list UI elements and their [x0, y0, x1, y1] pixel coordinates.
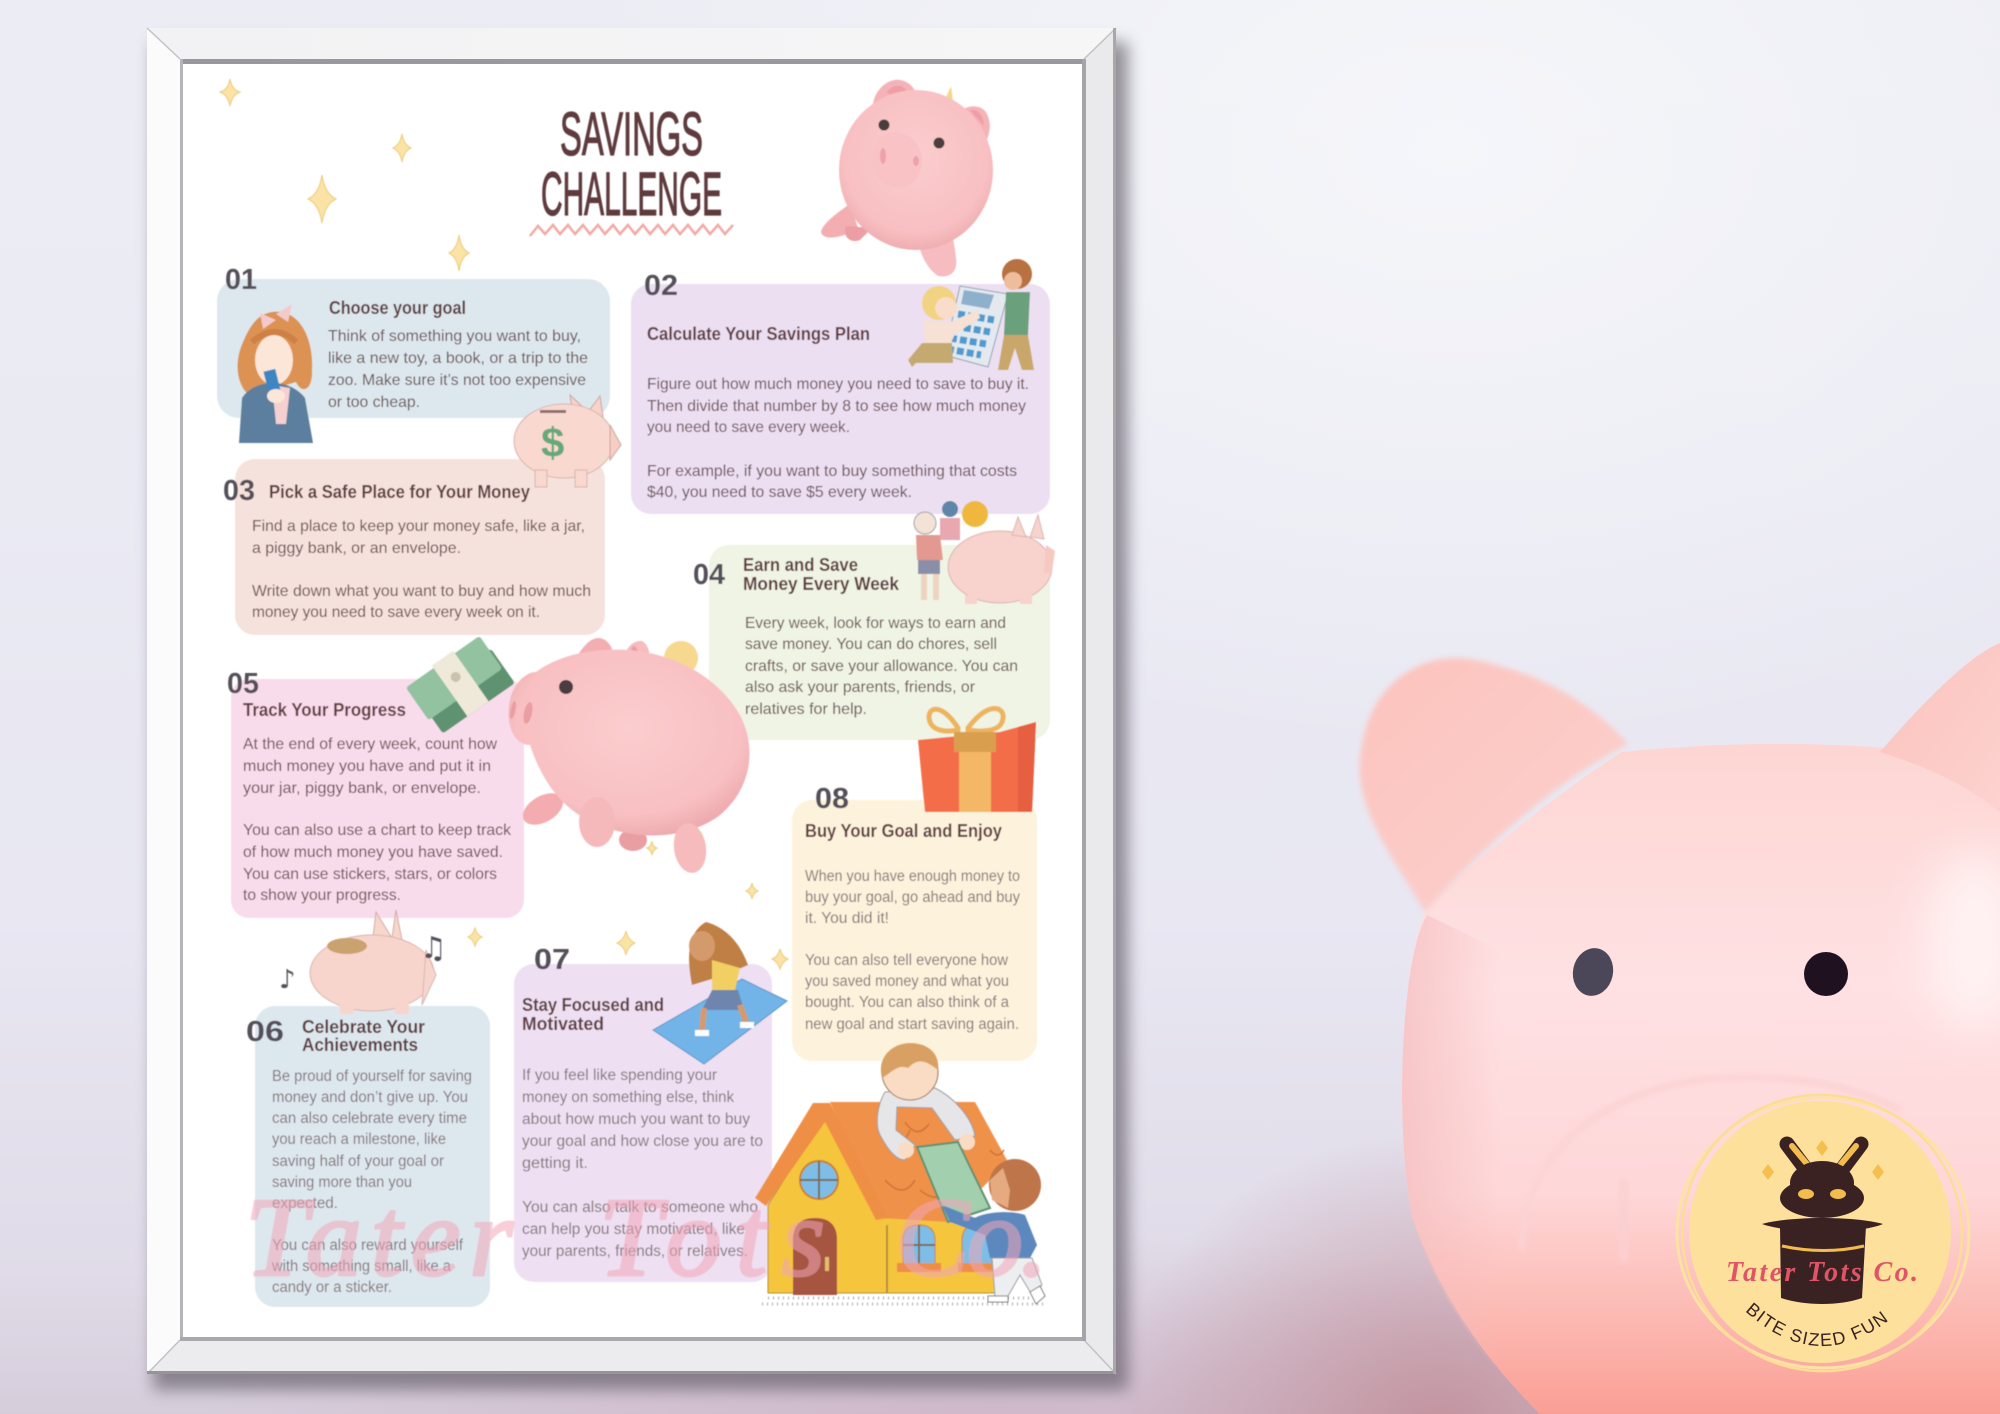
watermark text: Tots [599, 1176, 825, 1300]
ears [873, 80, 916, 105]
roof [830, 1102, 1008, 1222]
card 01 background [217, 279, 610, 418]
card 04 text [693, 555, 1018, 718]
card 06 text: saving half of your goal or [272, 1153, 444, 1170]
lower windows [903, 1225, 935, 1265]
lower boy legs [992, 1258, 1042, 1296]
card 05 text: your jar, piggy bank, or envelope. [243, 780, 481, 797]
card 03 text: a piggy bank, or an envelope. [252, 540, 461, 557]
card 08 text: 08 [815, 783, 849, 815]
card 06 text: You can also reward yourself [272, 1237, 464, 1254]
green paper [917, 1142, 990, 1222]
card 02 text [644, 270, 1029, 501]
pig eye left [1568, 944, 1618, 1000]
card 05 text: 05 [227, 668, 259, 700]
card 05 background [231, 679, 524, 918]
head highlight [1925, 850, 2000, 1030]
card 06 text: Achievements [302, 1035, 418, 1055]
calculator [944, 286, 1008, 367]
poster content [217, 79, 1055, 1307]
card 01 text [225, 264, 588, 411]
frame top side [147, 28, 1116, 59]
pig left ear [1360, 658, 1628, 912]
body [508, 650, 750, 835]
snout holes [522, 701, 534, 725]
pig right ear [1880, 643, 2000, 812]
upper boy head [882, 1044, 938, 1100]
legs [821, 204, 858, 238]
frame bottom side [147, 1340, 1116, 1374]
card 05 text: At the end of every week, count how [243, 736, 497, 753]
card 06 text: Celebrate Your [302, 1017, 425, 1037]
card 06 background [255, 1006, 490, 1307]
card 06 text: can also celebrate every time [272, 1110, 467, 1127]
logo name: Tater Tots Co. [1726, 1257, 1918, 1288]
card 03 text [223, 475, 591, 621]
card 07 text [522, 944, 763, 1260]
photo: large pink piggy bank [1360, 643, 2000, 1414]
card 08 text [805, 783, 1020, 1033]
card 02 text: $40, you need to save $5 every week. [647, 484, 912, 501]
card 07 text: your goal and how close you are to [522, 1133, 763, 1150]
card 07 text: Motivated [522, 1014, 604, 1034]
pig head [1402, 744, 2000, 1414]
watermark text: Co. [895, 1176, 1048, 1300]
frame left side [147, 28, 1116, 1374]
card 05 text: You can use stickers, stars, or colors [243, 866, 497, 883]
dollar sign: $ [541, 419, 564, 466]
card 06 text: you reach a milestone, like [272, 1131, 446, 1148]
card 06 text: candy or a sticker. [272, 1279, 392, 1296]
card 07 background [514, 964, 772, 1282]
frame shadow [153, 42, 1128, 1390]
card 07 text: 07 [534, 944, 570, 976]
watermark text [245, 1176, 1048, 1300]
card 06 text: expected. [272, 1195, 338, 1212]
card 07 text: your parents, friends, or relatives. [522, 1243, 748, 1260]
legs [517, 787, 569, 831]
pig left-side shading [1402, 915, 1500, 1375]
card 02 text: Figure out how much money you need to save to buy it. [647, 376, 1029, 393]
card 01 text: 01 [225, 264, 257, 296]
card 02 text: Calculate Your Savings Plan [647, 324, 870, 344]
title: SAVINGS [560, 100, 703, 168]
card 03 text: Find a place to keep your money safe, like a jar, [252, 518, 585, 535]
card 01 text: zoo. Make sure it’s not too expensive [328, 372, 586, 389]
boy [1002, 259, 1032, 289]
pig eye right [1804, 952, 1848, 996]
card 08 text: You can also tell everyone how [805, 952, 1009, 969]
rabbit in hat [1762, 1140, 1884, 1304]
illustration: gift box [918, 708, 1036, 812]
music notes: ♪ [279, 965, 296, 995]
lower boy head [989, 1159, 1041, 1211]
house walls [768, 1115, 995, 1293]
card 04 text: Earn and Save [743, 555, 858, 575]
title zigzag underline [530, 225, 733, 236]
illustration: kids with calculator [908, 259, 1034, 370]
illustration: kids feeding piggy bank [914, 501, 1055, 604]
card 06 text: money and don’t give up. You [272, 1089, 468, 1106]
card 02 text: 02 [644, 270, 678, 302]
card 07 text: can help you stay motivated, like [522, 1221, 745, 1238]
card 08 text: When you have enough money to [805, 868, 1020, 885]
card 01 text: or too cheap. [328, 394, 420, 411]
card 04 text: also ask your parents, friends, or [745, 679, 976, 696]
card 04 text: crafts, or save your allowance. You can [745, 658, 1018, 675]
card 08 text: you saved money and what you [805, 973, 1009, 990]
illustration: girl with card [238, 304, 313, 443]
sparkles [220, 79, 788, 969]
card 03 text: Pick a Safe Place for Your Money [269, 482, 530, 502]
card 03 text: 03 [223, 475, 255, 507]
card 02 text: For example, if you want to buy something that costs [647, 463, 1017, 480]
poster content: CHALLENGE [541, 160, 722, 228]
card 04 text: relatives for help. [745, 701, 867, 718]
picture frame [147, 28, 1128, 1390]
card 01 text: like a new toy, a book, or a trip to the [328, 350, 588, 367]
card 05 text [227, 668, 512, 904]
card 07 text: about how much you want to buy [522, 1111, 750, 1128]
card 07 text: getting it. [522, 1155, 588, 1172]
card 08 text: it. You did it! [805, 910, 889, 927]
card 02 background [631, 284, 1050, 514]
card 08 text: Buy Your Goal and Enjoy [805, 821, 1002, 841]
card 04 text: 04 [693, 559, 725, 591]
card 03 text: money you need to save every week on it. [252, 604, 540, 621]
girl [922, 286, 956, 320]
door [793, 1218, 837, 1295]
card 01 text: Choose your goal [329, 298, 466, 318]
title [541, 100, 722, 228]
card 08 text: bought. You can also think of a [805, 994, 1009, 1011]
card 06 text: 06 [246, 1016, 284, 1048]
card 08 text: buy your goal, go ahead and buy [805, 889, 1020, 906]
watermark text: Tater [245, 1176, 513, 1300]
card 04 text: Money Every Week [743, 574, 900, 594]
card 05 text: of how much money you have saved. [243, 844, 503, 861]
card 03 text: Write down what you want to buy and how much [252, 583, 591, 600]
card 05 text: to show your progress. [243, 887, 401, 904]
card 06 text: saving more than you [272, 1174, 412, 1191]
card 02 text: Then divide that number by 8 to see how much money [647, 398, 1026, 415]
card 04 text: save money. You can do chores, sell [745, 636, 997, 653]
round window [800, 1161, 838, 1199]
card 05 text: You can also use a chart to keep track [243, 822, 512, 839]
card 03 background [235, 459, 605, 635]
gable trim [755, 1103, 888, 1220]
frame right side [1084, 28, 1116, 1374]
pig snout [1522, 1077, 1900, 1250]
illustration: piggy with dollar sign [514, 395, 621, 487]
card 08 background [792, 800, 1037, 1061]
illustration: piggy with coins and music notes [279, 910, 447, 1014]
illustration: girl on credit card [653, 922, 787, 1064]
card 06 text [246, 1016, 472, 1296]
card 07 text: You can also talk to someone who [522, 1199, 758, 1216]
snout [867, 127, 927, 193]
card 02 text: you need to save every week. [647, 419, 850, 436]
card 06 text: with something small, like a [271, 1258, 451, 1275]
card 06 text: Be proud of yourself for saving [272, 1068, 472, 1085]
ears [575, 638, 613, 660]
illustration: house and two boys [755, 1043, 1045, 1304]
card 05 text: Track Your Progress [243, 700, 406, 720]
illustration: piggy with coins and music notes: ♫ [420, 931, 447, 966]
card 05 text: much money you have and put it in [243, 758, 491, 775]
snout slot [1619, 1178, 1628, 1262]
card 07 text: If you feel like spending your [522, 1067, 717, 1084]
card 01 text: Think of something you want to buy, [328, 328, 581, 345]
poster sheet [180, 59, 1084, 1340]
card 07 text: Stay Focused and [522, 995, 664, 1015]
illustration: money stack [404, 632, 515, 736]
lower boy jacket [942, 1205, 1037, 1258]
ground dots [762, 1298, 1044, 1304]
logo tagline: BITE SIZED FUN [1746, 1302, 1888, 1346]
body [839, 90, 993, 250]
card 07 text: money on something else, think [522, 1089, 734, 1106]
card 04 text: Every week, look for ways to earn and [745, 615, 1006, 632]
top 3D piggy [821, 80, 993, 276]
card 04 background [709, 545, 1050, 740]
logo badge [1676, 1094, 1970, 1372]
large 3D piggy [508, 638, 750, 875]
upper boy sweater [877, 1088, 975, 1160]
card 08 text: new goal and start saving again. [805, 1016, 1019, 1033]
